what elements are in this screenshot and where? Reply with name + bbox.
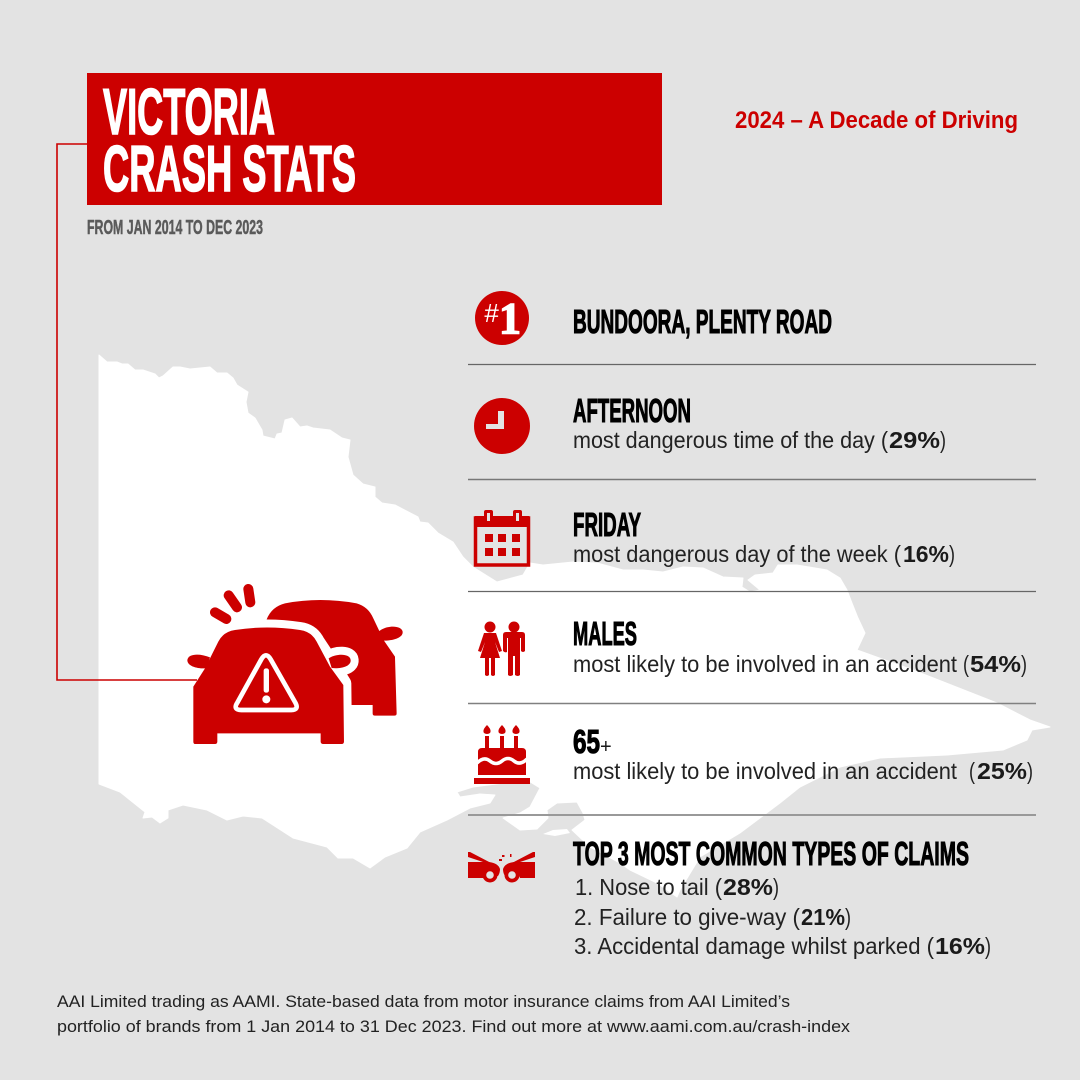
icon: clock [474, 398, 530, 454]
row: age: + [600, 736, 612, 758]
date range subtitle: FROM JAN 2014 TO DEC 2023 [87, 217, 263, 239]
row: top claim types: ) [985, 933, 991, 959]
icon: birthday cake [474, 725, 530, 784]
row: age [573, 723, 1033, 784]
icon: number one: # [484, 298, 499, 328]
row: top claim types: 1. Nose to tail ( [575, 874, 722, 900]
row: gender: ( [963, 651, 969, 677]
row: age: most likely to be involved in an accident [573, 758, 958, 784]
row: time of day: 29% [889, 427, 940, 453]
row: location: BUNDOORA, PLENTY ROAD [573, 303, 832, 340]
footer note: AAI Limited trading as AAMI. State-based data from motor insurance claims from AAI Limited’s [57, 993, 790, 1011]
row: gender: MALES [573, 615, 637, 652]
row: top claim types [573, 835, 991, 959]
row: day of week: most dangerous day of the week ( [573, 541, 901, 567]
map of Victoria [99, 355, 1050, 897]
row: top claim types: 28% [723, 874, 773, 900]
series label: 2024 – A Decade of Driving [735, 107, 1018, 134]
row: day of week: ) [949, 541, 955, 567]
icon: calendar [475, 510, 529, 565]
footer note [57, 993, 851, 1036]
row: age: ( [969, 758, 975, 784]
row: day of week: FRIDAY [573, 506, 641, 543]
row: age: 25% [977, 758, 1027, 784]
title banner: CRASH STATS [103, 132, 356, 205]
row: day of week: 16% [903, 541, 949, 567]
row: gender: 54% [970, 651, 1021, 677]
icon: two cars colliding [468, 852, 535, 882]
row: time of day: ) [940, 427, 946, 453]
row: gender: ) [1021, 651, 1027, 677]
row: gender: most likely to be involved in an accident [573, 651, 958, 677]
row: top claim types: ) [845, 904, 851, 930]
row: age: ) [1027, 758, 1033, 784]
connector line [57, 144, 197, 680]
divider lines [468, 364, 1036, 815]
row: age: 65 [573, 723, 600, 760]
row: top claim types: 16% [935, 933, 985, 959]
footer note: portfolio of brands from 1 Jan 2014 to 31 Dec 2023. Find out more at www.aami.com.au/crash-index [57, 1018, 851, 1036]
icon: woman and man [478, 622, 525, 676]
icon: number one [475, 291, 529, 345]
row: gender [573, 615, 1027, 677]
row: day of week [573, 506, 955, 567]
row: top claim types: ) [773, 874, 779, 900]
row: top claim types: 3. Accidental damage whilst parked ( [574, 933, 934, 959]
title banner [87, 73, 662, 205]
row: top claim types: 21% [801, 904, 845, 930]
row: top claim types: 2. Failure to give-way ( [574, 904, 800, 930]
row: time of day: AFTERNOON [573, 392, 691, 429]
row: time of day [573, 392, 946, 453]
row: time of day: most dangerous time of the day ( [573, 427, 888, 453]
icon: cars with warning [187, 589, 403, 744]
title banner: VICTORIA [103, 75, 275, 148]
icon: number one: 1 [499, 294, 521, 343]
